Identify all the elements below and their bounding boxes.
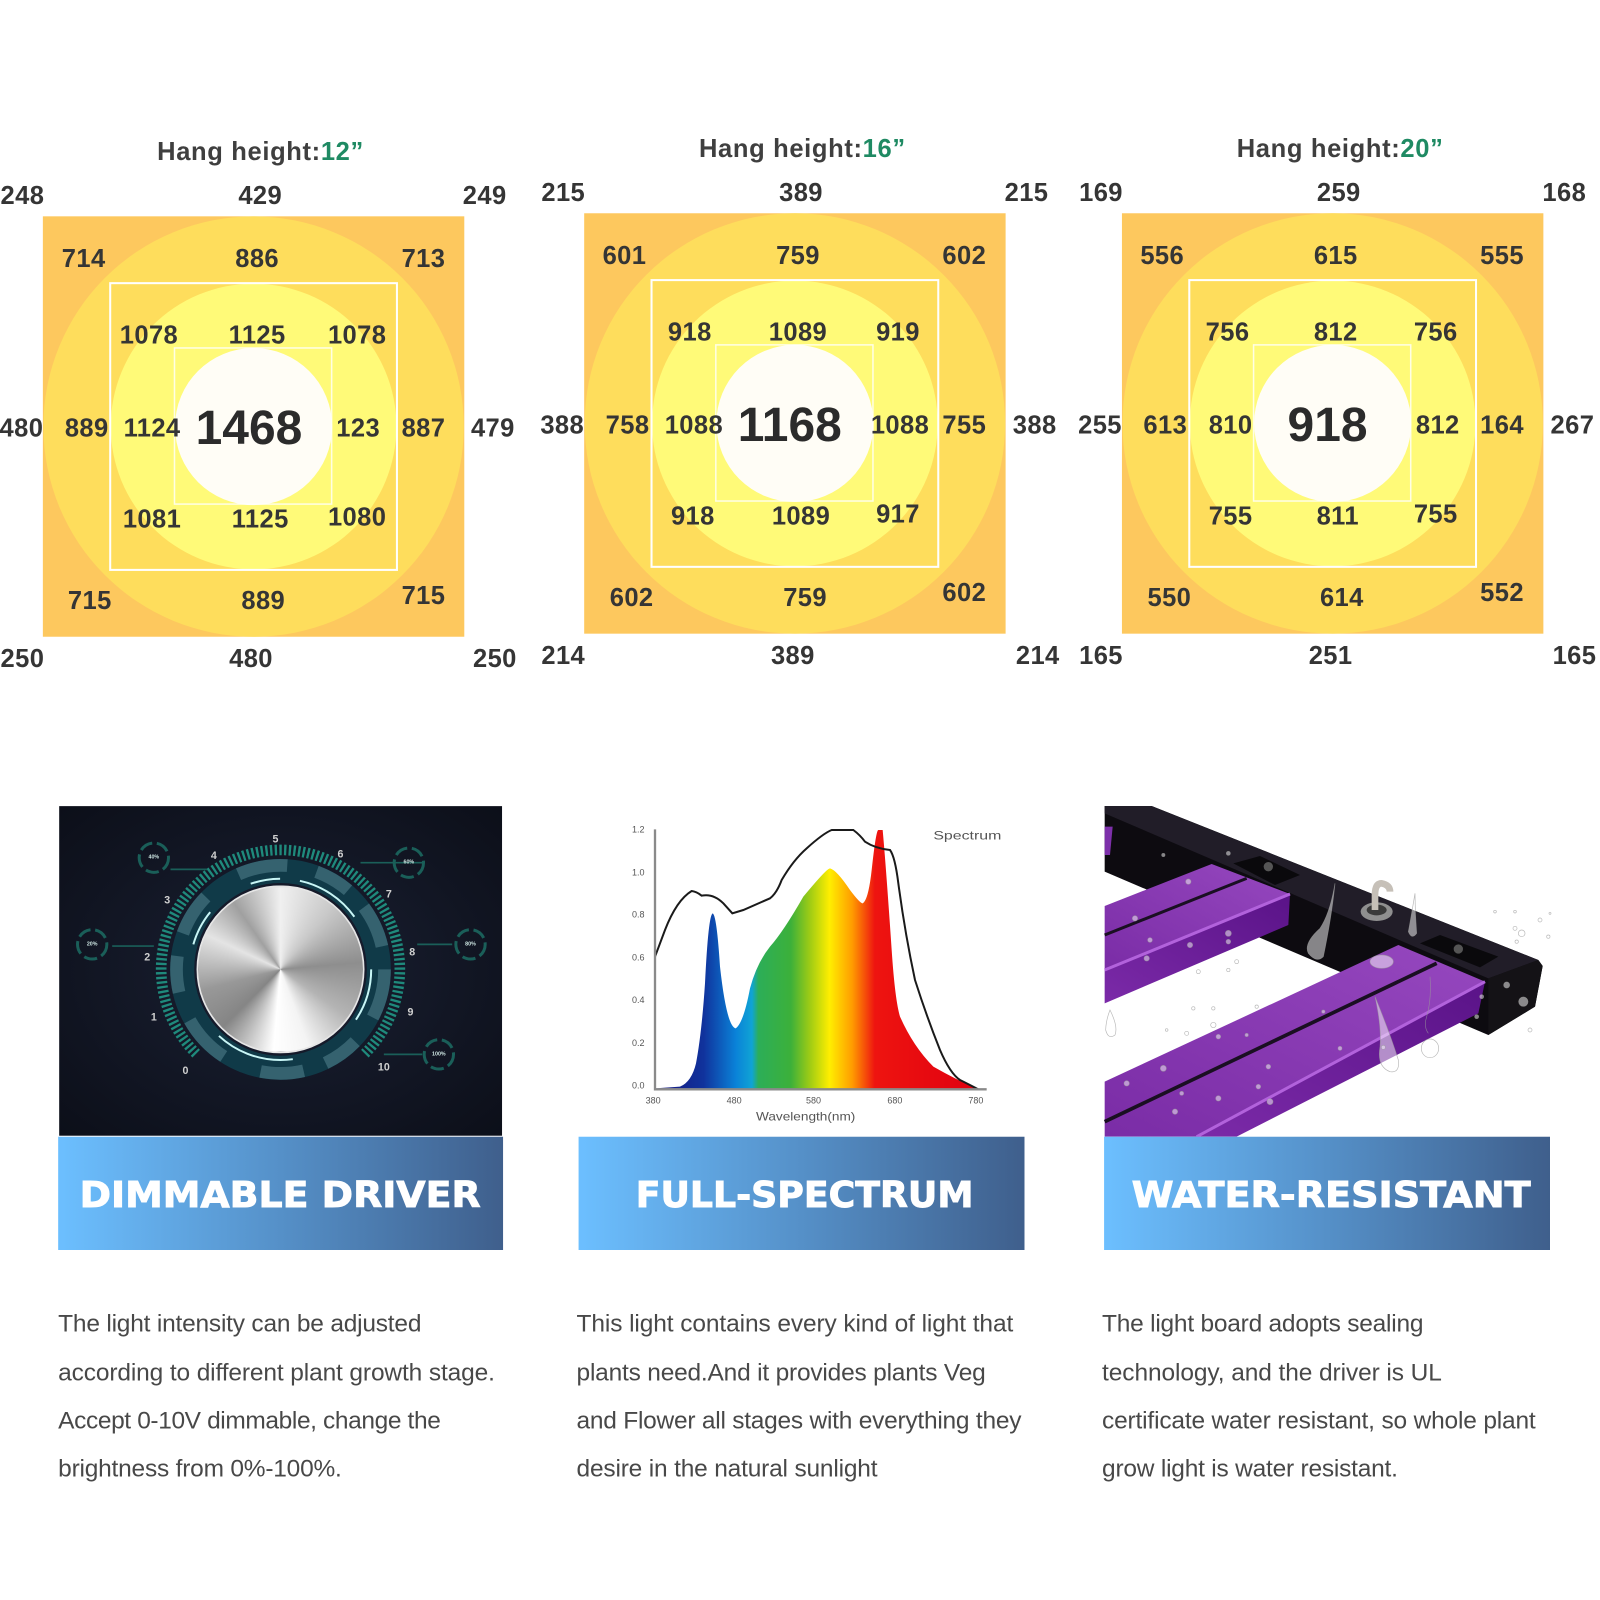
light intensity values: 552: [1480, 579, 1524, 607]
light intensity values: 889: [241, 587, 285, 615]
light intensity values: 602: [610, 584, 654, 612]
light intensity values: 602: [942, 242, 986, 270]
heat map zones: [584, 213, 1006, 634]
chart labels: 0.4: [632, 995, 645, 1005]
chart labels: Spectrum: [933, 828, 1001, 842]
light intensity values: [540, 179, 1060, 670]
percentage markers: 100%: [432, 1051, 446, 1057]
purple light bars: [1105, 827, 1485, 1137]
dial scale numbers: 7: [386, 888, 392, 900]
light intensity values: 215: [541, 179, 585, 207]
light intensity values: 1125: [229, 322, 286, 350]
percentage markers: 40%: [149, 855, 159, 861]
light intensity values: 250: [1, 645, 44, 673]
text block: water-resistant description: The light board adopts sealing: [1102, 1311, 1423, 1338]
text block: full-spectrum description: This light contains every kind of light that: [577, 1311, 1013, 1338]
dial segmented ring: [177, 865, 385, 1073]
light intensity values: 919: [876, 319, 920, 347]
panel: hang height 16 inch light map: [540, 135, 1060, 670]
text block: dimmable driver description: according to different plant growth stage.: [58, 1360, 495, 1387]
light intensity values: 1078: [120, 322, 178, 350]
dial tick scale: [161, 850, 400, 1054]
text block: dimmable driver description: brightness from 0%-100%.: [58, 1456, 342, 1483]
light intensity values: 214: [541, 642, 586, 670]
light intensity values: 165: [1553, 642, 1596, 670]
chart labels: 480: [727, 1095, 742, 1105]
text block: full-spectrum description: plants need.And it provides plants Veg: [577, 1360, 986, 1387]
light intensity values: 168: [1542, 179, 1586, 207]
light intensity values: 1088: [871, 412, 929, 440]
light intensity values: 480: [0, 415, 43, 443]
text block: dimmable driver description: [58, 1311, 495, 1483]
banner title: DIMMABLE DRIVER: [80, 1175, 481, 1216]
dial scale numbers: 10: [378, 1062, 390, 1074]
light intensity values: [1078, 179, 1596, 670]
text block: water-resistant description: [1102, 1311, 1536, 1483]
light intensity values: 249: [463, 182, 507, 210]
light intensity values: 1468: [196, 402, 302, 455]
dial scale numbers: 3: [164, 894, 170, 906]
percentage markers: 80%: [465, 941, 476, 947]
light intensity values: 615: [1314, 242, 1358, 270]
light intensity values: 918: [1288, 399, 1368, 452]
light intensity values: 267: [1551, 412, 1594, 440]
water drops: [1106, 851, 1551, 1114]
chart labels: 380: [646, 1095, 661, 1105]
light intensity values: 248: [1, 182, 44, 210]
light intensity values: 886: [235, 245, 279, 273]
text block: full-spectrum description: and Flower all stages with everything they: [577, 1408, 1022, 1435]
light intensity values: 755: [942, 412, 986, 440]
chart labels: 0.8: [632, 910, 645, 920]
dial scale numbers: [144, 833, 415, 1077]
light intensity values: 714: [62, 245, 106, 273]
light intensity values: 812: [1314, 319, 1358, 347]
light intensity values: 259: [1317, 179, 1361, 207]
banner: water-resistant: [1104, 1137, 1550, 1250]
light intensity values: 917: [876, 500, 920, 528]
light intensity values: 479: [471, 415, 515, 443]
light intensity values: 812: [1416, 412, 1460, 440]
panel: hang height 12 inch light map: [0, 138, 517, 673]
dial scale numbers: 9: [408, 1007, 414, 1019]
light intensity values: 169: [1079, 179, 1123, 207]
text block: full-spectrum description: desire in the natural sunlight: [577, 1456, 878, 1483]
chart labels: 1.0: [632, 867, 645, 877]
light intensity values: 713: [402, 245, 445, 273]
light intensity values: 214: [1016, 642, 1060, 670]
chart labels: 1.2: [632, 825, 645, 835]
panel: spectrum chart: [632, 825, 1001, 1124]
dial scale numbers: 4: [211, 850, 217, 862]
light intensity values: 755: [1209, 502, 1253, 530]
chart labels: Wavelength(nm): [756, 1110, 855, 1124]
banner: full-spectrum: [579, 1137, 1024, 1250]
light intensity values: 255: [1078, 412, 1122, 440]
dial scale numbers: 8: [409, 947, 415, 959]
light intensity values: 550: [1147, 584, 1191, 612]
chart labels: 780: [968, 1095, 983, 1105]
heading: hang height 20: Hang height:20”: [1237, 135, 1443, 163]
text block: full-spectrum description: [577, 1311, 1022, 1483]
text block: water-resistant description: certificate water resistant, so whole plant: [1102, 1408, 1536, 1435]
light intensity values: 1088: [665, 412, 723, 440]
chart labels: 0.0: [632, 1080, 645, 1090]
heading: hang height 16: Hang height:16”: [699, 135, 905, 163]
light intensity values: 480: [229, 645, 273, 673]
light intensity values: 810: [1209, 412, 1253, 440]
text block: water-resistant description: grow light is water resistant.: [1102, 1456, 1398, 1483]
silver knob: [197, 885, 365, 1053]
chart labels: [632, 825, 1001, 1124]
light intensity values: 614: [1320, 584, 1364, 612]
light intensity values: 613: [1143, 412, 1187, 440]
light intensity values: 602: [942, 579, 986, 607]
chart labels: 0.2: [632, 1038, 645, 1048]
light intensity values: 759: [776, 242, 820, 270]
light intensity values: [0, 182, 517, 673]
banner: dimmable driver: [58, 1137, 503, 1250]
light intensity values: 889: [65, 415, 109, 443]
light intensity values: 918: [671, 502, 715, 530]
light intensity values: 1168: [738, 399, 842, 452]
light intensity values: 164: [1480, 412, 1524, 440]
light intensity values: 215: [1005, 179, 1048, 207]
dial scale numbers: 0: [183, 1065, 189, 1077]
light intensity values: 1081: [123, 505, 181, 533]
light intensity values: 250: [473, 645, 517, 673]
light intensity values: 811: [1317, 502, 1359, 530]
dial scale numbers: 2: [144, 952, 150, 964]
light intensity values: 123: [336, 415, 380, 443]
dial scale numbers: 5: [273, 833, 279, 845]
percentage markers: 20%: [87, 941, 98, 947]
chart axes: [655, 829, 987, 1089]
light intensity values: 388: [540, 412, 584, 440]
light intensity values: 758: [606, 412, 649, 440]
banner title: FULL-SPECTRUM: [636, 1175, 973, 1216]
light intensity values: 1080: [328, 503, 386, 531]
chart labels: 0.6: [632, 953, 645, 963]
light intensity values: 1124: [124, 415, 181, 443]
light intensity values: 756: [1206, 319, 1249, 347]
light intensity values: 759: [783, 584, 827, 612]
chart labels: 680: [887, 1095, 902, 1105]
heat map zones: [1122, 213, 1543, 634]
light intensity values: 251: [1309, 642, 1353, 670]
banner title: WATER-RESISTANT: [1132, 1175, 1531, 1216]
light intensity values: 556: [1140, 242, 1184, 270]
light intensity values: 887: [402, 415, 445, 443]
light intensity values: 165: [1079, 642, 1123, 670]
light intensity values: 1089: [772, 502, 830, 530]
light intensity values: 388: [1013, 412, 1057, 440]
dial scale numbers: 1: [151, 1012, 157, 1024]
dial scale numbers: 6: [338, 848, 344, 860]
light intensity values: 715: [402, 582, 445, 610]
panel: dimmable driver dial image: [59, 806, 502, 1136]
text block: water-resistant description: technology, and the driver is UL: [1102, 1360, 1442, 1387]
hanging hook: [1361, 883, 1393, 921]
text block: dimmable driver description: The light intensity can be adjusted: [58, 1311, 421, 1338]
light intensity values: 756: [1414, 319, 1458, 347]
light intensity values: 1125: [232, 505, 289, 533]
light intensity values: 429: [238, 182, 282, 210]
percentage markers: 60%: [404, 860, 414, 866]
spectrum black reference curve: [655, 830, 978, 1089]
percentage markers: [78, 843, 485, 1069]
light intensity values: 755: [1414, 500, 1458, 528]
light intensity values: 1089: [769, 319, 827, 347]
light intensity values: 389: [771, 642, 815, 670]
spectrum colour area: [655, 830, 978, 1089]
light intensity values: 1078: [328, 322, 386, 350]
heat map zones: [43, 216, 464, 637]
black frame bar: [1105, 806, 1543, 1035]
heading: hang height 12: Hang height:12”: [157, 138, 363, 166]
light intensity values: 555: [1480, 242, 1524, 270]
panel: hang height 20 inch light map: [1078, 135, 1596, 670]
chart labels: 580: [806, 1095, 821, 1105]
text block: dimmable driver description: Accept 0-10V dimmable, change the: [58, 1408, 441, 1435]
light intensity values: 918: [668, 319, 712, 347]
light intensity values: 715: [68, 587, 112, 615]
light intensity values: 601: [603, 242, 646, 270]
panel: water-resistant light bar image: [1105, 806, 1551, 1137]
light intensity values: 389: [779, 179, 823, 207]
